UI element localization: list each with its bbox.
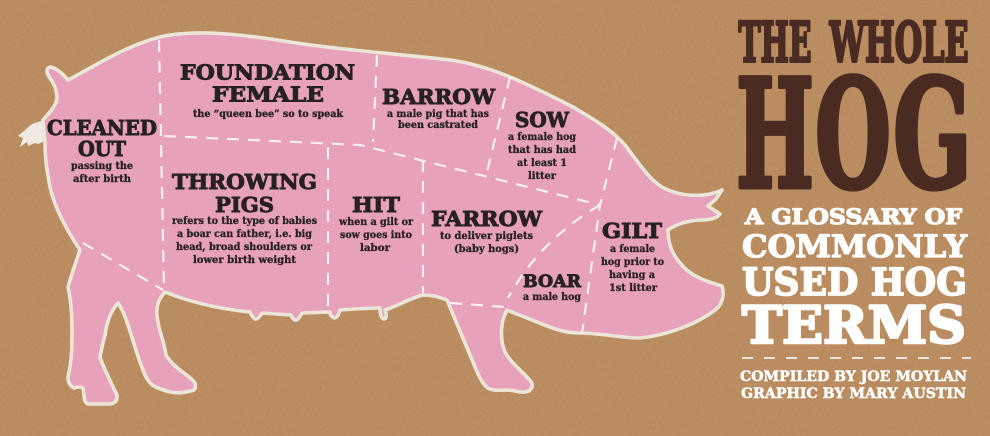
term: sow [508, 108, 577, 182]
term: boar [523, 272, 582, 303]
term: sow: litter [528, 170, 556, 182]
term: sow: a female hog [508, 131, 577, 143]
term: throwing pigs: lower birth weight [193, 254, 296, 266]
term: sow: SOW [515, 108, 570, 132]
term: cleaned out: OUT [78, 137, 127, 161]
term: farrow [431, 207, 543, 255]
term: throwing pigs: refers to the type of babies [172, 215, 317, 227]
term: barrow [382, 85, 496, 131]
term: throwing pigs: THROWING [172, 170, 317, 194]
term: hit: sow goes into [340, 229, 412, 241]
title: the whole hog [736, 10, 972, 223]
subtitle: a glossary of commonly used hog terms [742, 205, 968, 356]
term: sow: at least 1 [517, 157, 567, 169]
subtitle: a glossary of commonly used hog terms: USED HOG [742, 260, 967, 304]
term: gilt: a female [610, 243, 655, 255]
term: barrow: been castrated [398, 119, 479, 131]
subtitle: a glossary of commonly used hog terms: TERMS [742, 296, 966, 356]
term: farrow: FARROW [431, 207, 543, 231]
term: sow: that has had [508, 144, 577, 156]
term: foundation female [180, 60, 355, 120]
term: hit: HIT [352, 193, 401, 217]
term: foundation female: the “queen bee” so to speak [193, 108, 344, 120]
term: farrow: (baby hogs) [454, 243, 519, 255]
term: gilt [601, 219, 664, 294]
term: throwing pigs: PIGS [215, 193, 274, 217]
term: cleaned out [47, 116, 157, 185]
term: hit: labor [360, 242, 391, 254]
term: cleaned out: CLEANED [47, 116, 157, 140]
credits: COMPILED BY JOE MOYLAN [740, 369, 967, 385]
credits [740, 369, 967, 402]
term: throwing pigs [172, 170, 317, 266]
segment dashed lines [83, 40, 617, 333]
term: cleaned out: passing the [71, 160, 133, 172]
credits: GRAPHIC BY MARY AUSTIN [741, 386, 966, 402]
term: foundation female: FOUNDATION [180, 60, 355, 84]
term: throwing pigs: head, broad shoulders or [176, 241, 312, 253]
subtitle: a glossary of commonly used hog terms: A GLOSSARY OF [744, 205, 962, 230]
term: boar: BOAR [523, 272, 582, 292]
title: the whole hog: H [736, 47, 814, 223]
term: throwing pigs: a boar can father, i.e. big [177, 228, 313, 240]
subtitle: a glossary of commonly used hog terms: COMMONLY [742, 229, 968, 265]
term: boar: a male hog [523, 291, 582, 303]
term: foundation female: FEMALE [212, 82, 324, 106]
title: the whole hog: THE [738, 10, 812, 74]
pig body with segments [43, 33, 723, 404]
term: gilt: GILT [602, 219, 663, 243]
term: cleaned out: after birth [73, 173, 131, 185]
term: gilt: 1st litter [609, 282, 657, 294]
term: hit: when a gilt or [338, 216, 413, 228]
term: barrow: BARROW [382, 85, 496, 109]
term: barrow: a male pig that has [387, 108, 489, 120]
term: gilt: having a [609, 269, 655, 281]
term: farrow: to deliver piglets [440, 230, 533, 242]
term: hit [338, 193, 413, 254]
icon: tail tuft [18, 120, 47, 147]
term: gilt: hog prior to [601, 256, 664, 268]
title: the whole hog: O [815, 47, 891, 223]
